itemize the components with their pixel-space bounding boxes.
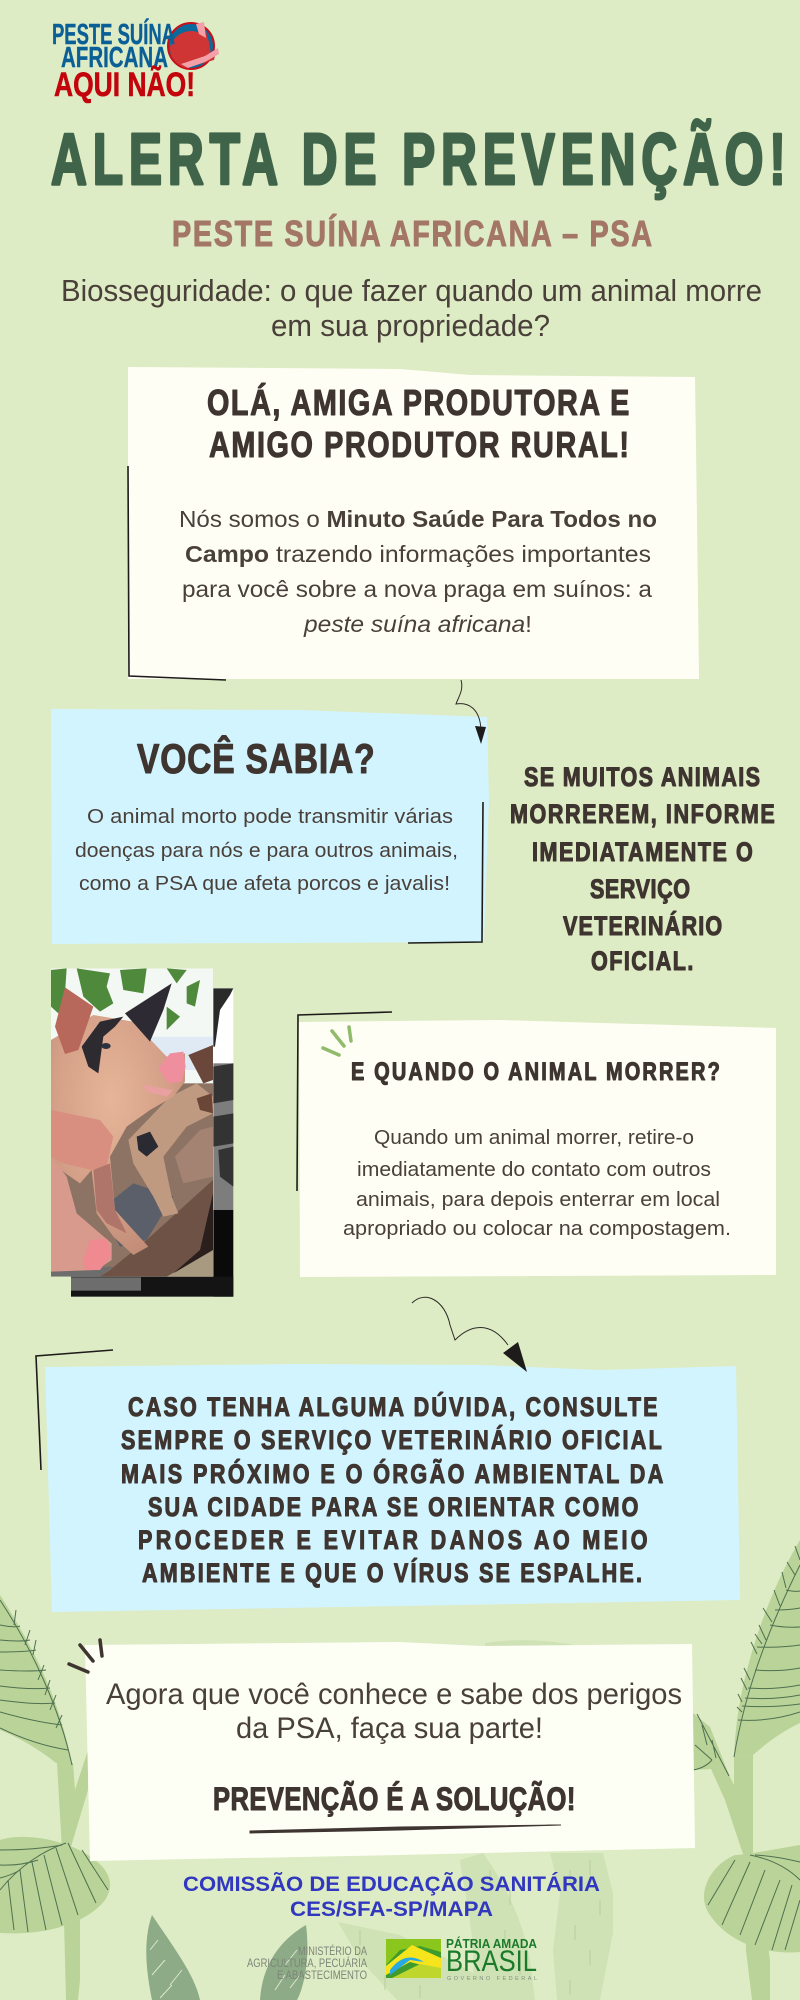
decorative plant: right [693,1540,800,2000]
greeting body: Nós somos o Minuto Saúde Para Todos no [179,506,657,532]
intro question [61,273,762,343]
panel body [343,1126,731,1240]
panel body: imediatamente do contato com outros [357,1158,711,1181]
consult text: MAIS PRÓXIMO E O ÓRGÃO AMBIENTAL DA [121,1459,663,1490]
trough [100,1180,213,1277]
consult text: PROCEDER E EVITAR DANOS AO MEIO [138,1526,648,1556]
você sabia body [75,805,458,895]
panel body: animais, para depois enterrar em local [356,1188,720,1211]
text: report to veterinary service [510,763,775,977]
footer: Pátria Amada Brasil [446,1936,537,1982]
consult text: AMBIENTE E QUE O VÍRUS SE ESPALHE. [142,1558,642,1589]
você sabia heading: VOCÊ SABIA? [137,734,375,783]
greeting heading: OLÁ, AMIGA PRODUTORA E [207,382,629,423]
footer: Pátria Amada Brasil: GOVERNO FEDERAL [447,1976,537,1982]
footer: commission name [183,1873,600,1921]
arrow: curved to blue panel [412,1297,527,1372]
greeting body: Campo trazendo informações importantes [185,541,651,567]
footer: Pátria Amada Brasil: PÁTRIA AMADA [446,1936,537,1951]
footer: ministry [247,1945,367,1982]
pig photo [51,968,233,1297]
panel: greeting [128,367,699,680]
text: report to veterinary service: IMEDIATAMENTE O [532,838,753,868]
footer: ministry: MINISTÉRIO DA [298,1945,367,1958]
panel body: apropriado ou colocar na compostagem. [343,1217,731,1240]
logo text [52,17,195,104]
title: ALERTA DE PREVENÇÃO! [51,120,786,200]
main pig ear left [55,987,93,1054]
call to action text: Agora que você conhece e sabe dos perigos [106,1678,682,1711]
lower base [51,1083,213,1277]
lower foreground pig [51,1157,112,1272]
text: report to veterinary service: SERVIÇO [590,875,690,905]
main pig snout [158,1052,186,1083]
main pig ear right [125,983,172,1042]
text: report to veterinary service: OFICIAL. [591,947,693,977]
main pig body [51,1015,185,1255]
call to action text: da PSA, faça sua parte! [236,1712,543,1745]
você sabia body: O animal morto pode transmitir várias [87,805,453,828]
você sabia body: como a PSA que afeta porcos e javalis! [79,872,450,895]
accent ticks [323,1027,351,1055]
slogan: PREVENÇÃO É A SOLUÇÃO! [213,1780,575,1818]
greeting heading [207,382,629,465]
footer: Pátria Amada Brasil: BRASIL [446,1945,537,1978]
panel: você sabia [51,709,489,944]
footer: ministry: E ABASTECIMENTO [277,1970,367,1982]
slogan underline [250,1825,561,1833]
consult text: SEMPRE O SERVIÇO VETERINÁRIO OFICIAL [121,1425,662,1456]
logo text: PESTE SUÍNA [52,17,175,51]
accent ticks [69,1640,102,1672]
panel: call to action [69,1640,695,1861]
intro question: Biosseguridade: o que fazer quando um animal morre [61,273,762,308]
greeting body: peste suína africana ! [303,611,532,637]
foliage [51,968,200,1030]
consult text [121,1392,663,1589]
call to action text [106,1678,682,1745]
second pig [128,1083,213,1217]
footer: ministry: AGRICULTURA, PECUÁRIA [247,1957,367,1970]
logo magnifier icon [168,22,219,69]
logo text: AFRICANA [61,42,168,74]
logo text: AQUI NÃO! [54,66,195,104]
water background [147,1037,213,1070]
decorative plant: left [0,1595,110,2000]
você sabia body: doenças para nós e para outros animais, [75,839,458,862]
panel body: Quando um animal morrer, retire-o [374,1126,694,1149]
arrow: greeting to você sabia [456,680,486,744]
main pig black patch [82,1017,123,1073]
text: report to veterinary service: MORREREM, INFORME [510,800,775,830]
logo: Peste Suína Africana Aqui Não [52,17,219,104]
panel: when the animal dies [297,1012,776,1277]
background leaves: bottom centre [146,1640,613,2000]
greeting body: para você sobre a nova praga em suínos: a [182,576,652,602]
consult text: CASO TENHA ALGUMA DÚVIDA, CONSULTE [128,1392,658,1423]
footer: commission name: COMISSÃO DE EDUCAÇÃO SANITÁRIA [183,1873,600,1896]
footer: commission name: CES/SFA-SP/MAPA [290,1898,493,1921]
intro question: em sua propriedade? [271,308,550,343]
photo shadow layer [71,988,233,1297]
subtitle: PESTE SUÍNA AFRICANA – PSA [172,213,652,254]
back pig [175,1127,213,1183]
text: report to veterinary service: SE MUITOS ANIMAIS [524,763,760,793]
text: report to veterinary service: VETERINÁRIO [563,911,722,942]
footer: Brasil flag logo [386,1939,441,1978]
panel heading: E QUANDO O ANIMAL MORRER? [351,1058,720,1086]
consult text: SUA CIDADE PARA SE ORIENTAR COMO [148,1493,638,1523]
greeting body [179,506,657,637]
greeting heading: AMIGO PRODUTOR RURAL! [209,424,629,465]
panel: consult official service [36,1350,740,1612]
